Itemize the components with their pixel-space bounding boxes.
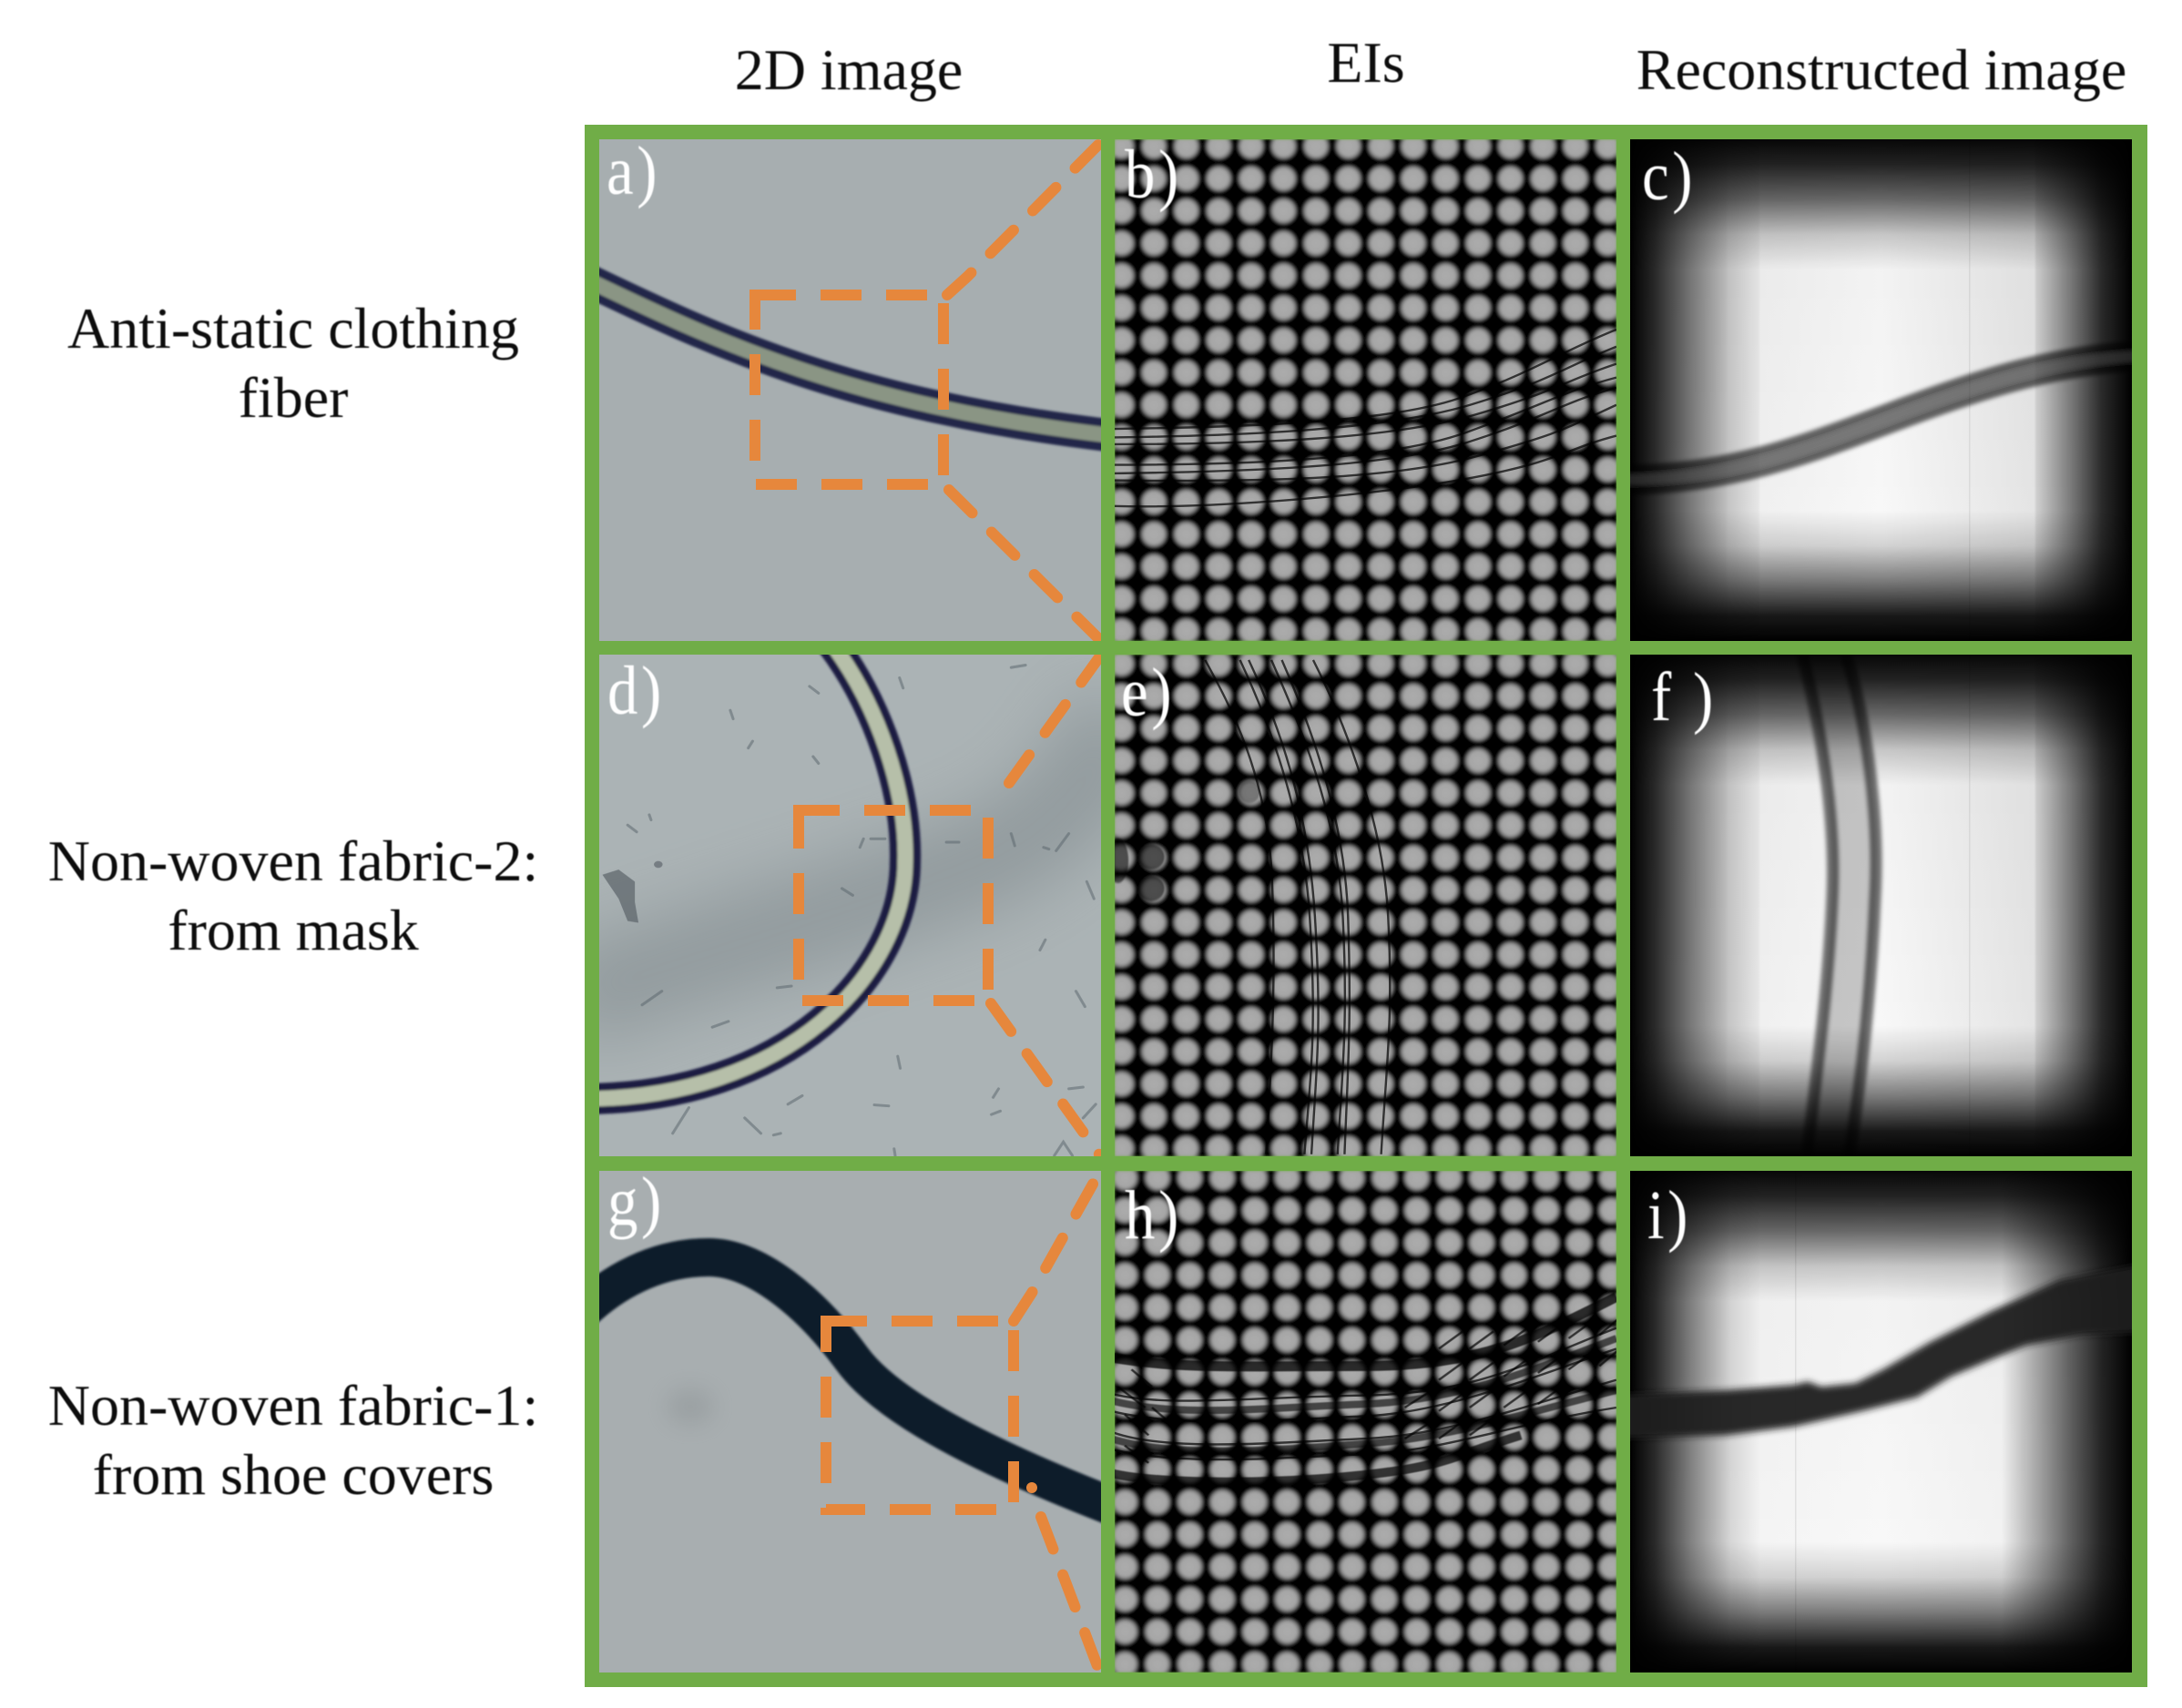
panel d: 2D image of fabric-2 [565,642,1129,1156]
green grid frame [585,125,2147,1687]
letter b: b) [1125,137,1182,213]
panel f: reconstructed image [1630,651,2132,1161]
zoom lines d [991,657,1099,1154]
row label: Anti-static clothing fiber: fiber [239,365,348,430]
fiber d [583,642,905,1099]
darkened lens spots e [1107,781,1259,901]
letter g: g) [607,1164,665,1240]
row label: Non-woven fabric-1 from shoe covers: Non-woven fabric-1: [48,1373,538,1438]
column heading: EIs: EIs [1327,30,1405,95]
row label: Non-woven fabric-1 from shoe covers: from shoe covers [93,1442,494,1507]
faint seam c [1969,205,1971,583]
panel i: reconstructed image [1603,1171,2163,1672]
fiber stripes b [1111,330,1616,506]
letter a: a) [607,133,660,209]
orange dot g [1026,1482,1037,1493]
faint seam i [1795,1171,1796,1672]
row label: Anti-static clothing fiber: Anti-static clothing [67,296,519,361]
panel e: elemental images [1107,655,1616,1156]
zoom lines g [1014,1173,1099,1671]
panel c: reconstructed image [1621,138,2140,641]
fiber stripes e [1205,660,1390,1154]
specks d [603,666,1096,1155]
row label: Non-woven fabric-2 from mask: from mask [168,898,419,962]
shadow band d [565,719,1129,1001]
panel g: 2D image of fabric-1 [569,1164,1116,1672]
zoom box a [755,295,943,484]
faint smudge g [674,1393,707,1420]
fiber f [1801,651,1876,1161]
fiber stripes h [1111,1317,1620,1463]
dark shadow bands h [1111,1296,1616,1482]
letter e: e) [1121,655,1175,731]
column heading: 2D image: 2D image [735,37,963,102]
fiber i [1603,1260,2163,1439]
fiber g [569,1257,1116,1508]
letter f: f ) [1651,659,1717,736]
faint seam f [1969,720,1971,1098]
letter i: i) [1647,1177,1691,1254]
panel b: elemental images [1111,137,1616,641]
zoom lines a [947,143,1100,638]
fiber a [583,278,1116,436]
fiber c [1621,356,2140,480]
panel h: elemental images [1111,1171,1620,1672]
row label: Non-woven fabric-2 from mask: Non-woven fabric-2: [48,829,538,893]
letter d: d) [607,653,665,729]
letter c: c) [1642,138,1696,215]
panel a: 2D image of anti-static fiber [583,133,1116,641]
column heading: Reconstructed image: Reconstructed image [1636,37,2126,102]
letter h: h) [1125,1177,1182,1254]
zoom box g [826,1321,1014,1510]
zoom box d [799,810,988,1001]
